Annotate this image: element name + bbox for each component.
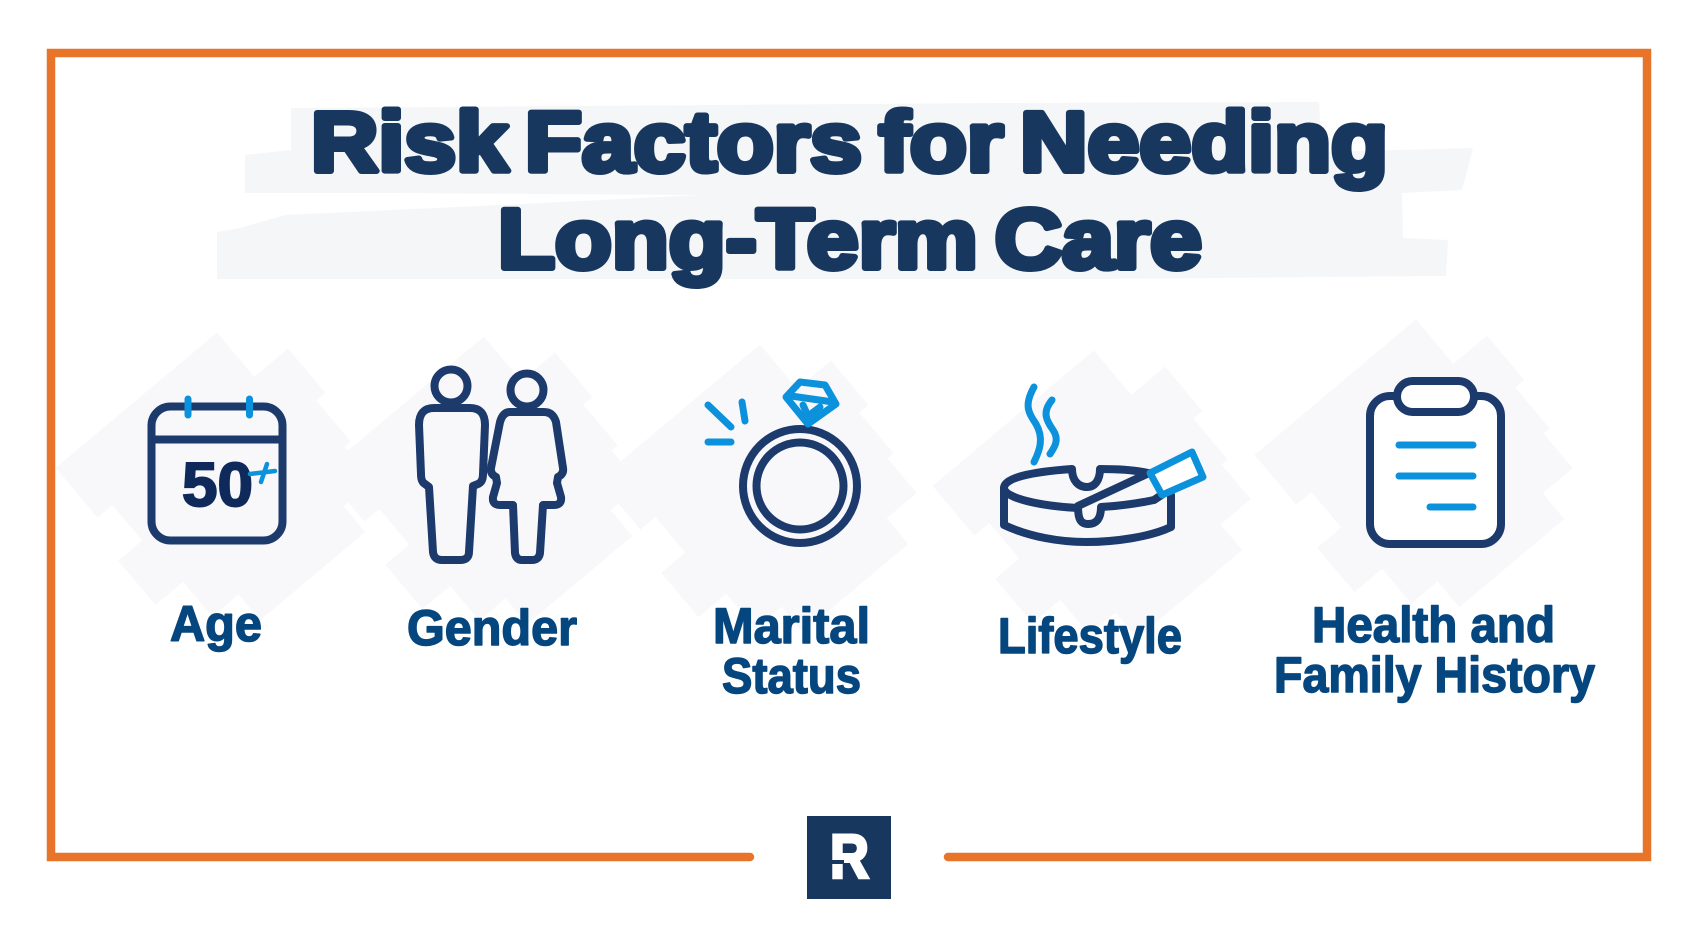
label: marital status: Marital [713, 598, 870, 654]
title brush background [217, 102, 1473, 279]
icon: ashtray with cigarette [1004, 387, 1203, 542]
title: Long-Term Care [498, 192, 1202, 286]
label: marital status: Status [722, 648, 861, 704]
brush: age [47, 304, 410, 666]
icon: man and woman [419, 370, 563, 560]
logo: R [830, 823, 869, 892]
label: health and family history: Family History [1274, 647, 1595, 703]
brush: gender [314, 308, 677, 670]
brush: marital status [590, 316, 953, 678]
icon: clipboard [1370, 381, 1501, 544]
icon: calendar 50+ [152, 399, 282, 540]
panel: marital status [590, 316, 953, 704]
brush: health and family history [1246, 291, 1609, 653]
logo [807, 816, 891, 899]
label: gender: Gender [407, 600, 577, 656]
label: marital status [713, 598, 870, 704]
label: lifestyle: Lifestyle [998, 608, 1182, 664]
title [311, 95, 1388, 286]
brush: lifestyle [924, 322, 1287, 684]
label: health and family history [1274, 597, 1595, 703]
label: age: Age [170, 596, 262, 652]
panel: gender [314, 308, 677, 670]
label: health and family history: Health and [1312, 597, 1555, 653]
panel: age [47, 304, 410, 666]
title: Risk Factors for Needing [311, 95, 1388, 189]
panel: health and family history [1246, 291, 1609, 703]
icon: calendar 50+: 50 [182, 451, 253, 520]
icon: diamond ring [708, 382, 857, 543]
panel: lifestyle [924, 322, 1287, 684]
